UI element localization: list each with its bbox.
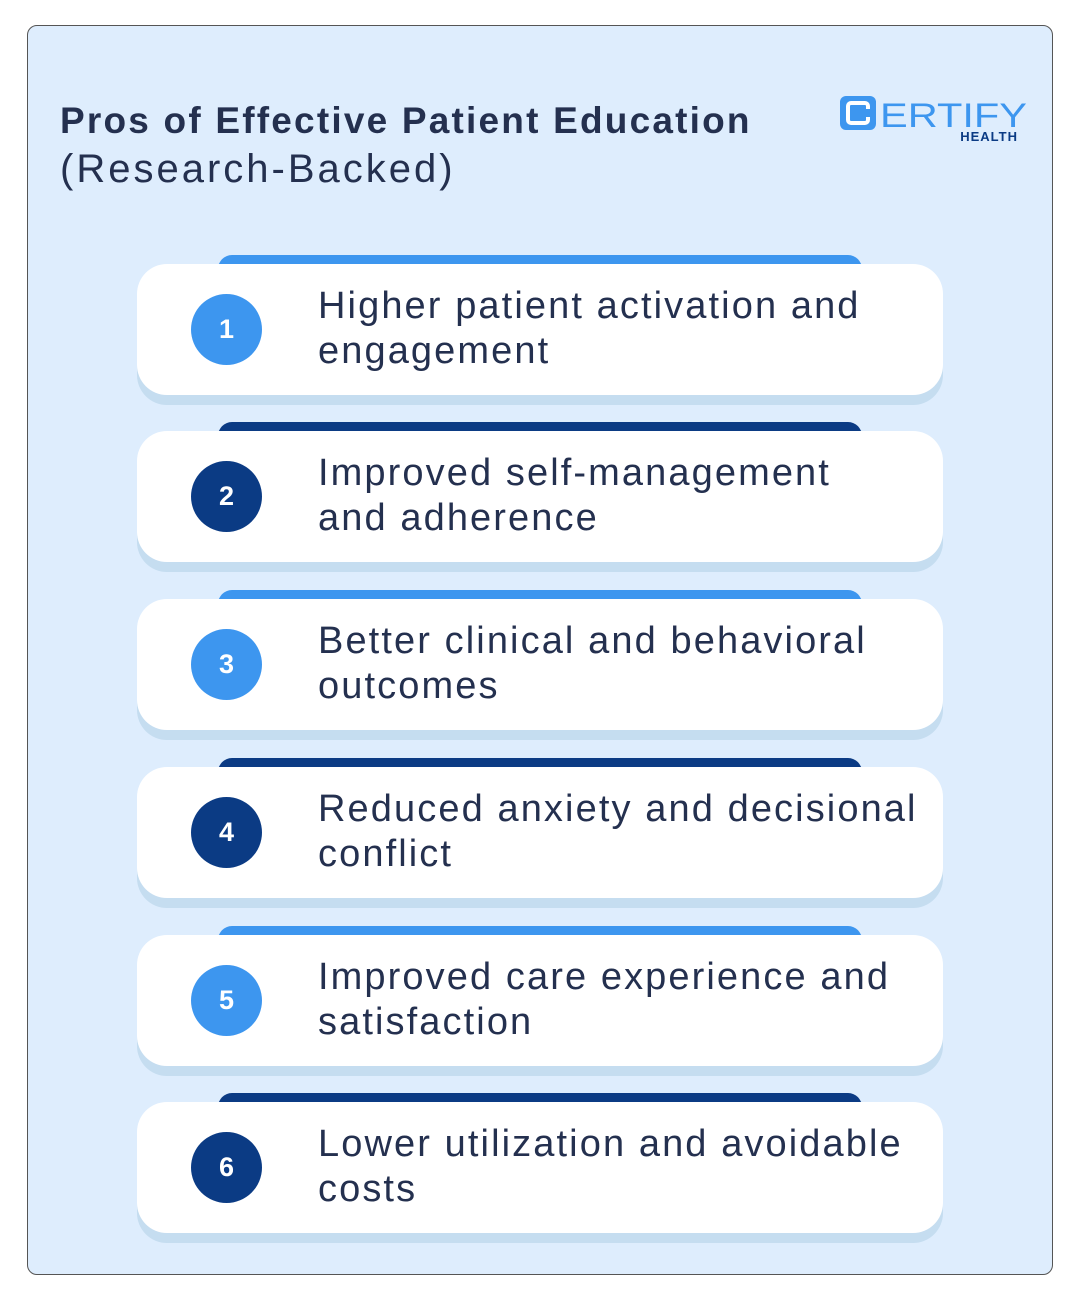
number badge 6: 6 [219, 1152, 234, 1182]
title [60, 100, 752, 191]
text 1: engagement [318, 330, 550, 372]
text 1: Higher patient activation and [318, 285, 861, 327]
number badge 3 [191, 629, 262, 700]
item 3 [137, 590, 943, 740]
number badge 2: 2 [219, 481, 234, 511]
logo: certify health: HEALTH [960, 129, 1018, 144]
text 6 [318, 1123, 903, 1210]
text 3: outcomes [318, 665, 500, 707]
text 5 [318, 956, 890, 1043]
title: (Research-Backed) [60, 147, 456, 191]
number badge 4: 4 [219, 817, 234, 847]
text 3 [318, 620, 867, 707]
text 1 [318, 285, 861, 372]
number badge 5 [191, 965, 262, 1036]
text 4: Reduced anxiety and decisional [318, 788, 918, 830]
text 6: Lower utilization and avoidable [318, 1123, 903, 1165]
item 1 [137, 255, 943, 405]
item 6 [137, 1093, 943, 1243]
text 5: satisfaction [318, 1001, 533, 1043]
text 4 [318, 788, 918, 875]
text 2: Improved self-management [318, 452, 831, 494]
number badge 5: 5 [219, 985, 234, 1015]
text 2: and adherence [318, 497, 599, 539]
logo: certify health: ERTIFY [880, 97, 1027, 135]
text 2 [318, 452, 831, 539]
number badge 4 [191, 797, 262, 868]
item 2 [137, 422, 943, 572]
text 5: Improved care experience and [318, 956, 890, 998]
number badge 3: 3 [219, 649, 234, 679]
number badge 2 [191, 461, 262, 532]
number badge 1 [191, 294, 262, 365]
number badge 1: 1 [219, 314, 234, 344]
text 6: costs [318, 1168, 417, 1210]
title: Pros of Effective Patient Education [60, 100, 752, 141]
text 3: Better clinical and behavioral [318, 620, 867, 662]
text 4: conflict [318, 833, 453, 875]
item 4 [137, 758, 943, 908]
logo: certify health [840, 96, 1027, 144]
number badge 6 [191, 1132, 262, 1203]
item 5 [137, 926, 943, 1076]
